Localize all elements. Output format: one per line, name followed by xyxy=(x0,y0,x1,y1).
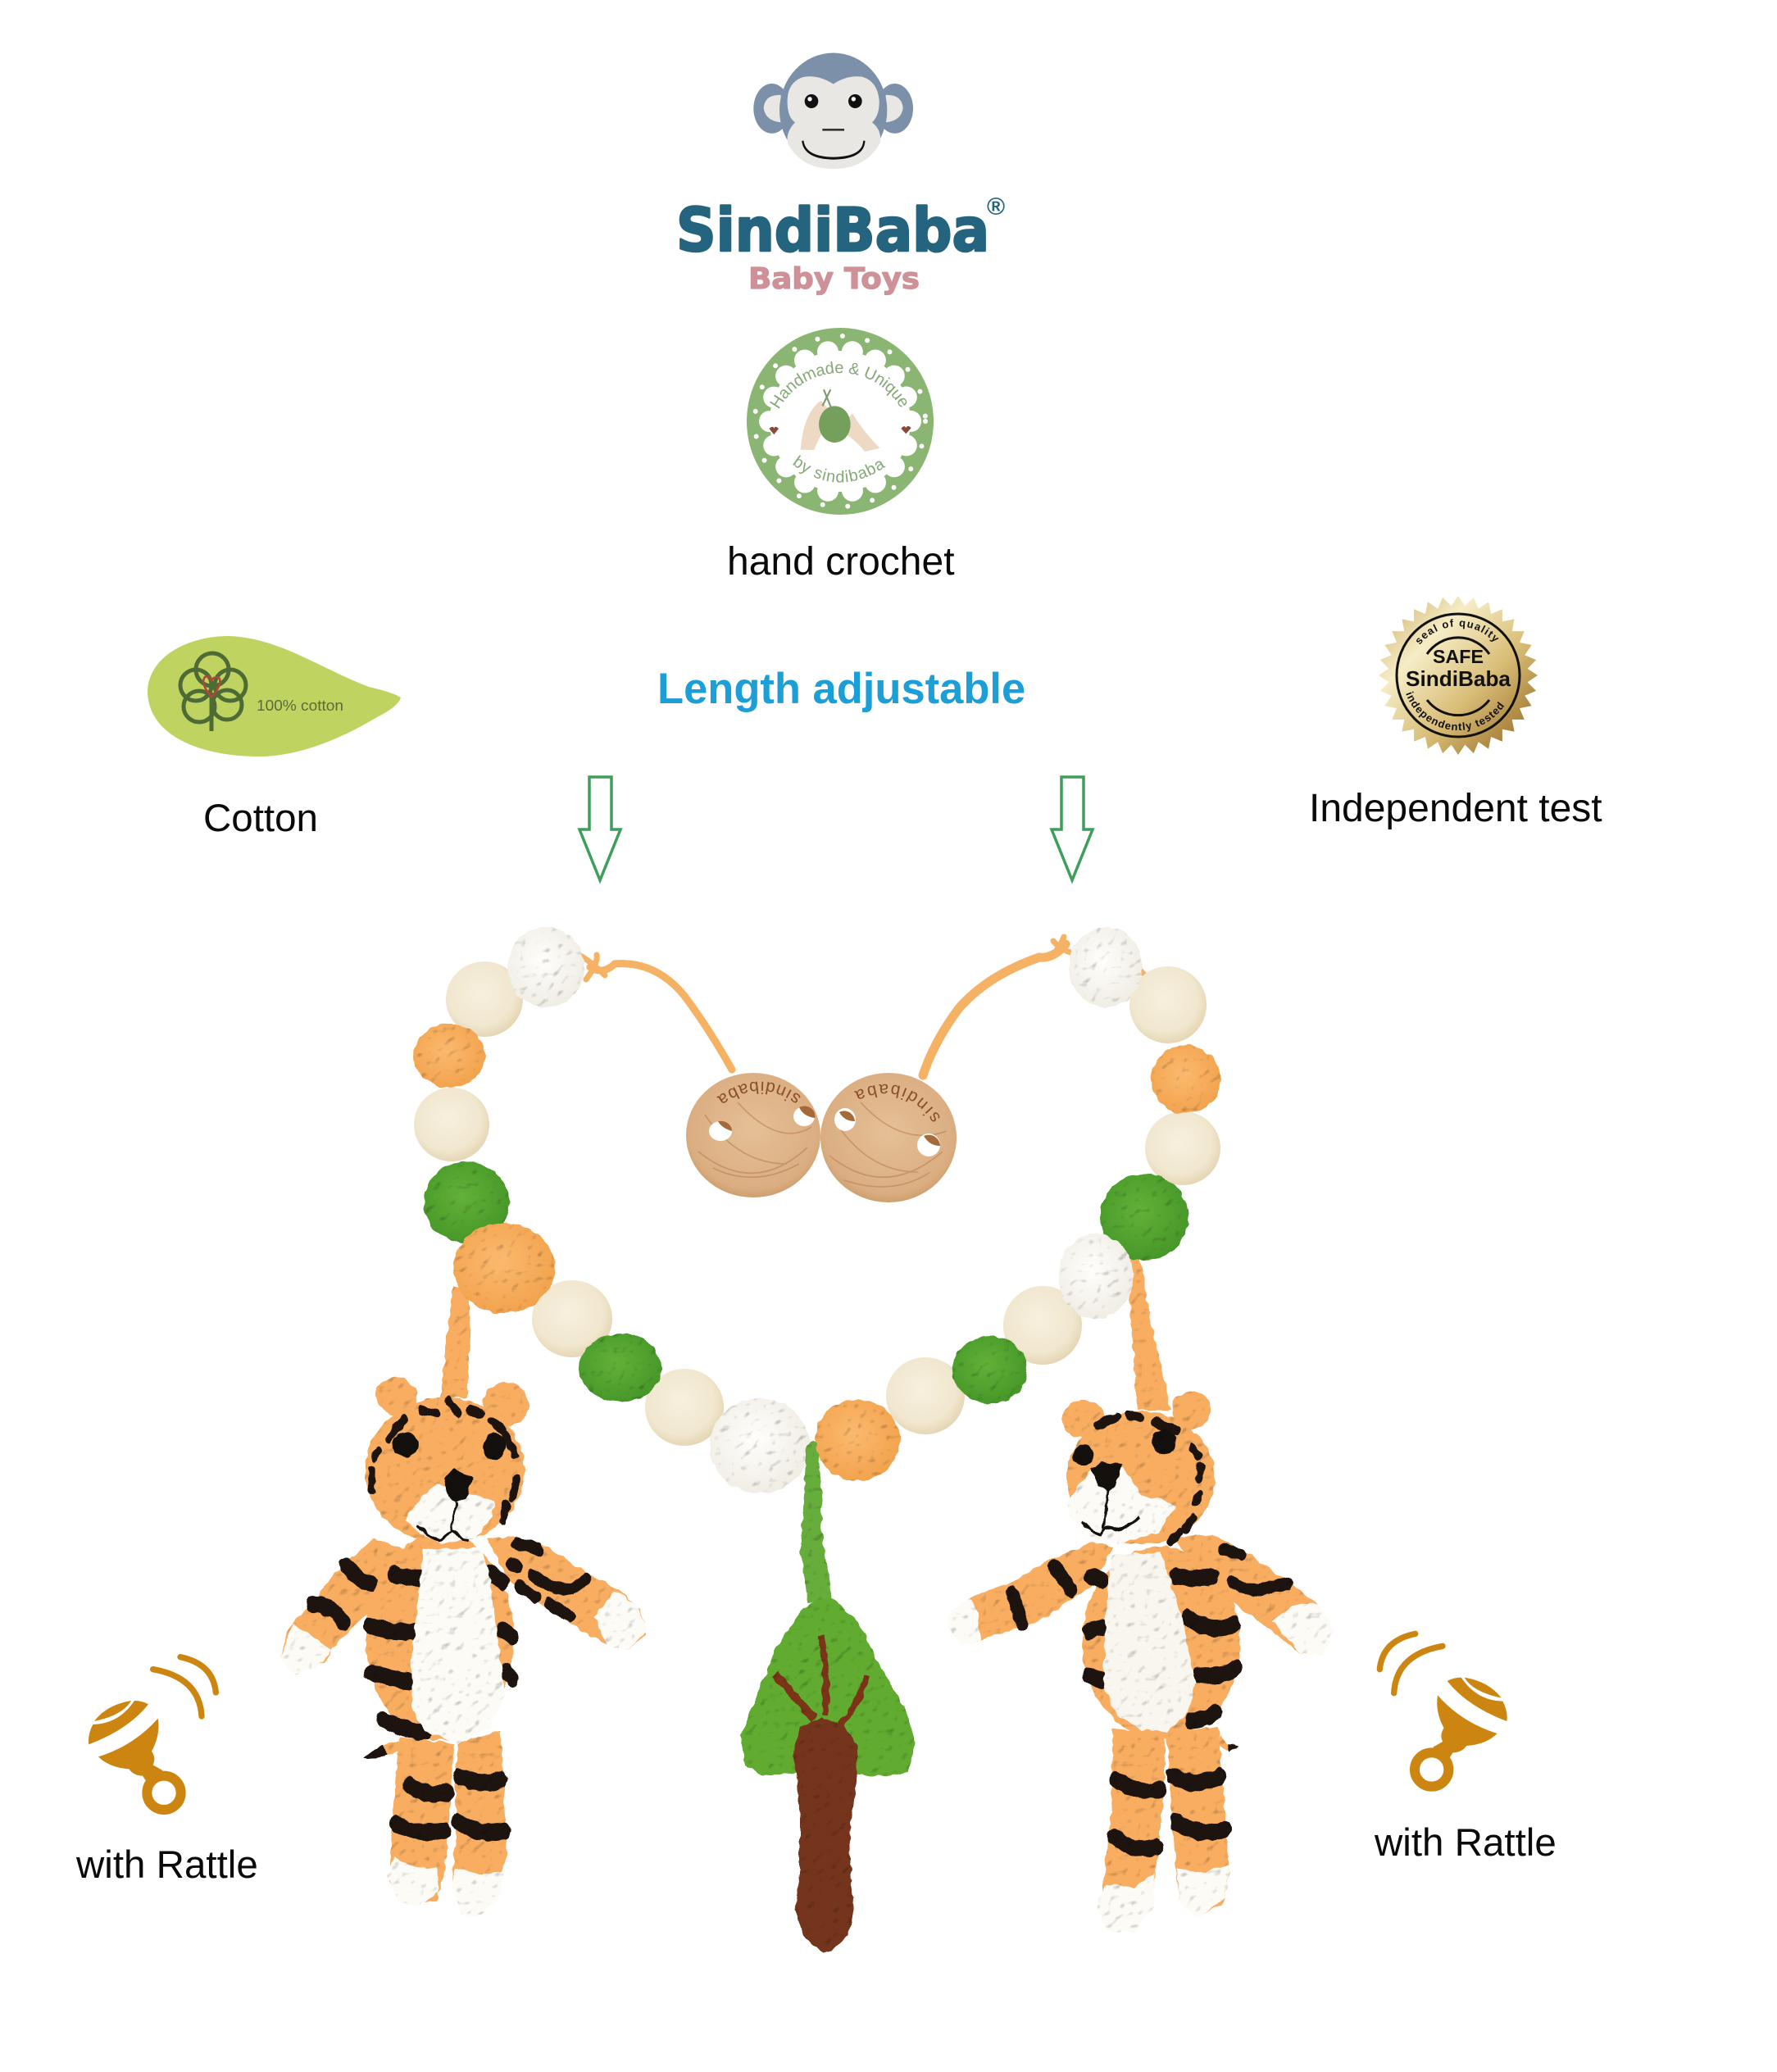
label: Cotton: Cotton xyxy=(203,797,318,840)
seal text: SindiBaba: SindiBaba xyxy=(1406,666,1511,691)
heading: Length adjustable: Length adjustable xyxy=(657,665,1025,713)
seal text: independently tested: independently tested xyxy=(1406,691,1505,732)
label: with Rattle (right): with Rattle xyxy=(1374,1821,1557,1865)
clip engraving: sindibaba: sindibaba xyxy=(716,1082,800,1103)
right tiger head xyxy=(1066,1411,1215,1544)
label: with Rattle (left): with Rattle xyxy=(75,1843,258,1887)
badge: gold safety seal xyxy=(1379,596,1538,755)
product: elastic cords xyxy=(579,937,1143,1075)
product: crochet tree xyxy=(740,1442,916,1953)
wordmark: Baby Toys: Baby Toys xyxy=(748,262,920,296)
arrow: right length adjust xyxy=(1052,777,1093,880)
brand logo: SindiBaba monkey and wordmark xyxy=(676,53,1005,296)
hanging straps to tigers xyxy=(441,1254,1170,1410)
leaf text: 100% cotton: 100% cotton xyxy=(257,697,343,714)
product: wooden beads xyxy=(414,961,1220,1446)
product: crochet beads xyxy=(413,927,1220,1493)
right tiger body xyxy=(1082,1547,1240,1738)
left tiger arms xyxy=(280,1538,403,1674)
icon: monkey face xyxy=(753,53,913,169)
badge illustration: hands crocheting xyxy=(769,389,911,452)
label: Independent test: Independent test xyxy=(1309,787,1602,830)
right tiger ears xyxy=(1062,1400,1105,1438)
label: hand crochet: hand crochet xyxy=(727,540,955,584)
icon: right rattle xyxy=(1379,1634,1507,1787)
clip engraving: sindibaba: sindibaba xyxy=(854,1084,939,1121)
badge text: Handmade & Unique: Handmade & Unique xyxy=(770,361,907,408)
seal text: seal of quality: seal of quality xyxy=(1416,619,1498,644)
left tiger belly xyxy=(411,1547,506,1743)
arrow: left length adjust xyxy=(579,777,620,880)
right tiger legs xyxy=(1101,1729,1166,1898)
right tiger arms xyxy=(948,1542,1113,1644)
badge: handmade and unique xyxy=(747,328,934,515)
right tiger belly xyxy=(1104,1552,1195,1732)
registered mark: ® xyxy=(987,193,1005,220)
wordmark: SindiBaba: SindiBaba xyxy=(676,196,989,266)
left clip xyxy=(686,1073,820,1197)
left tiger head xyxy=(365,1397,525,1543)
seal text: SAFE: SAFE xyxy=(1433,646,1484,667)
left tiger legs xyxy=(389,1738,453,1904)
icon: cotton plant xyxy=(180,653,246,731)
product: wooden clips xyxy=(686,1073,957,1202)
right clip xyxy=(820,1073,957,1202)
icon: left rattle xyxy=(89,1657,216,1810)
product: left tiger xyxy=(280,1377,646,1915)
left tiger body xyxy=(366,1534,514,1740)
left tiger tail xyxy=(363,1741,400,1758)
badge text: by sindibaba: by sindibaba xyxy=(793,455,885,483)
icon: cotton leaf xyxy=(148,636,401,757)
product: right tiger xyxy=(948,1391,1334,1932)
left tiger ears xyxy=(375,1377,417,1415)
right tiger tail xyxy=(1219,1733,1239,1751)
